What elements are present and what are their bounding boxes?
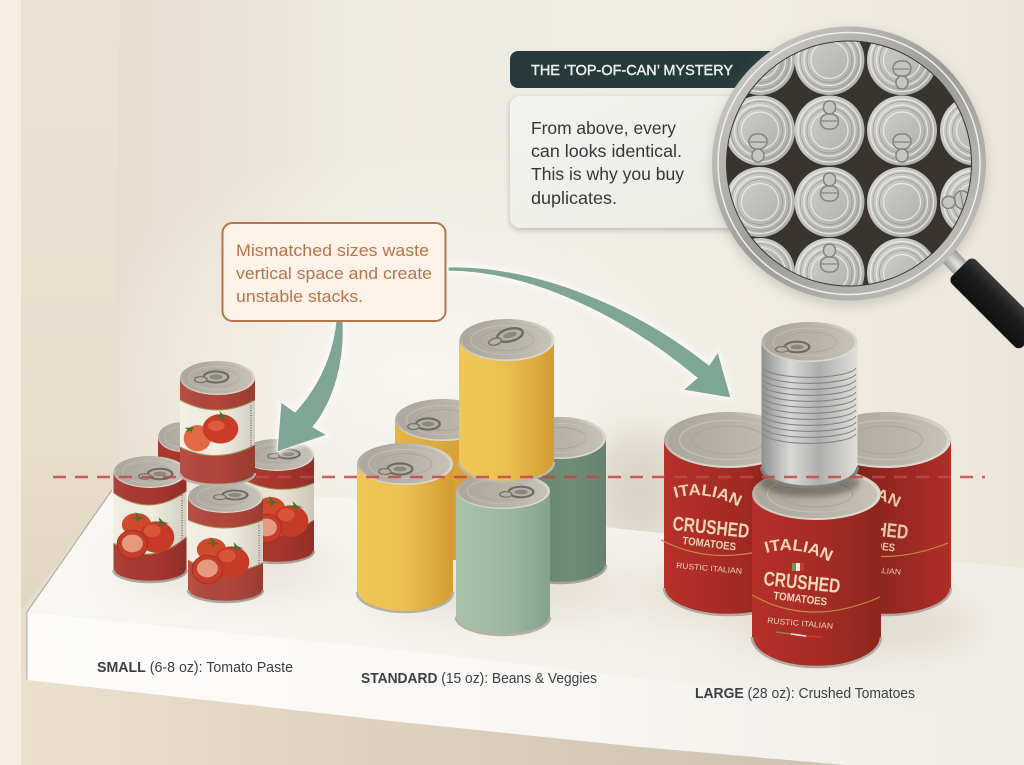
callout text: vertical space and create [236,264,432,283]
label text: TOMATOES [682,535,737,554]
label: large cans: LARGE (28 oz): Crushed Tomatoes [695,685,915,702]
can: front green [456,473,550,635]
can: back green [514,417,606,583]
small cans: tomato paste [114,361,314,602]
label text: RUSTIC ITALIAN [767,616,834,631]
callout: mismatched sizes [222,223,446,321]
magnifying glass [712,25,1024,351]
label text: RUSTIC ITALIAN [676,561,743,576]
label text [830,490,948,577]
label text [660,484,752,576]
panel body: duplicates. [531,188,617,208]
can shadows on shelf [120,550,980,653]
shelf front edge [27,612,1024,765]
label text: RUSTIC ITALIAN [835,562,902,577]
can: front left [114,456,186,582]
label text: CRUSHED [762,568,841,598]
can: back left [660,412,766,616]
panel heading: THE ‘TOP-OF-CAN’ MYSTERY [531,63,733,79]
panel body [510,96,770,230]
can: back yellow [395,399,491,560]
label text [752,539,880,638]
wall shadow beside large cans [590,430,690,550]
panel body: can looks identical. [531,141,682,161]
label text: CRUSHED [830,514,909,544]
magnifier handle [948,256,1024,351]
shelf top surface [27,490,1024,722]
label text: ITALIAN [764,539,834,562]
arrow: callout to large cans [448,267,731,398]
label text: TOMATOES [841,536,896,555]
label text: ITALIAN [674,484,742,506]
panel body: This is why you buy [531,164,684,184]
magnified can tops [728,42,971,286]
red dashed height line [53,476,985,478]
label text: ITALIAN [880,490,902,508]
panel body: From above, every [531,118,676,138]
can: top yellow [459,319,554,482]
under shelf wall [21,670,1024,765]
panel: top-of-can mystery [510,51,785,230]
callout text [236,241,432,306]
label text: CRUSHED [671,513,750,543]
left side wall [20,0,120,765]
can: top of stack [180,361,255,485]
magnifier rim [712,26,986,300]
can: front centre [188,481,263,602]
shelf [27,490,1024,765]
label: standard cans: STANDARD (15 oz): Beans & Veggies [361,670,597,687]
left wall edge strip [0,0,21,765]
label text: TOMATOES [773,590,828,609]
arrow: callout to small cans [277,321,343,452]
can: front [750,474,882,668]
callout text: unstable stacks. [236,287,363,306]
callout text: Mismatched sizes waste [236,241,429,260]
can: back right [240,439,314,563]
label: small cans: SMALL (6-8 oz): Tomato Paste [97,659,293,676]
panel heading [510,51,785,88]
can: bare silver on top [760,322,860,497]
standard cans: beans and veggies [357,319,606,635]
can: left yellow [357,443,453,612]
large cans: crushed tomatoes [660,322,952,668]
can: back right [830,412,952,616]
can: back left [158,422,208,470]
